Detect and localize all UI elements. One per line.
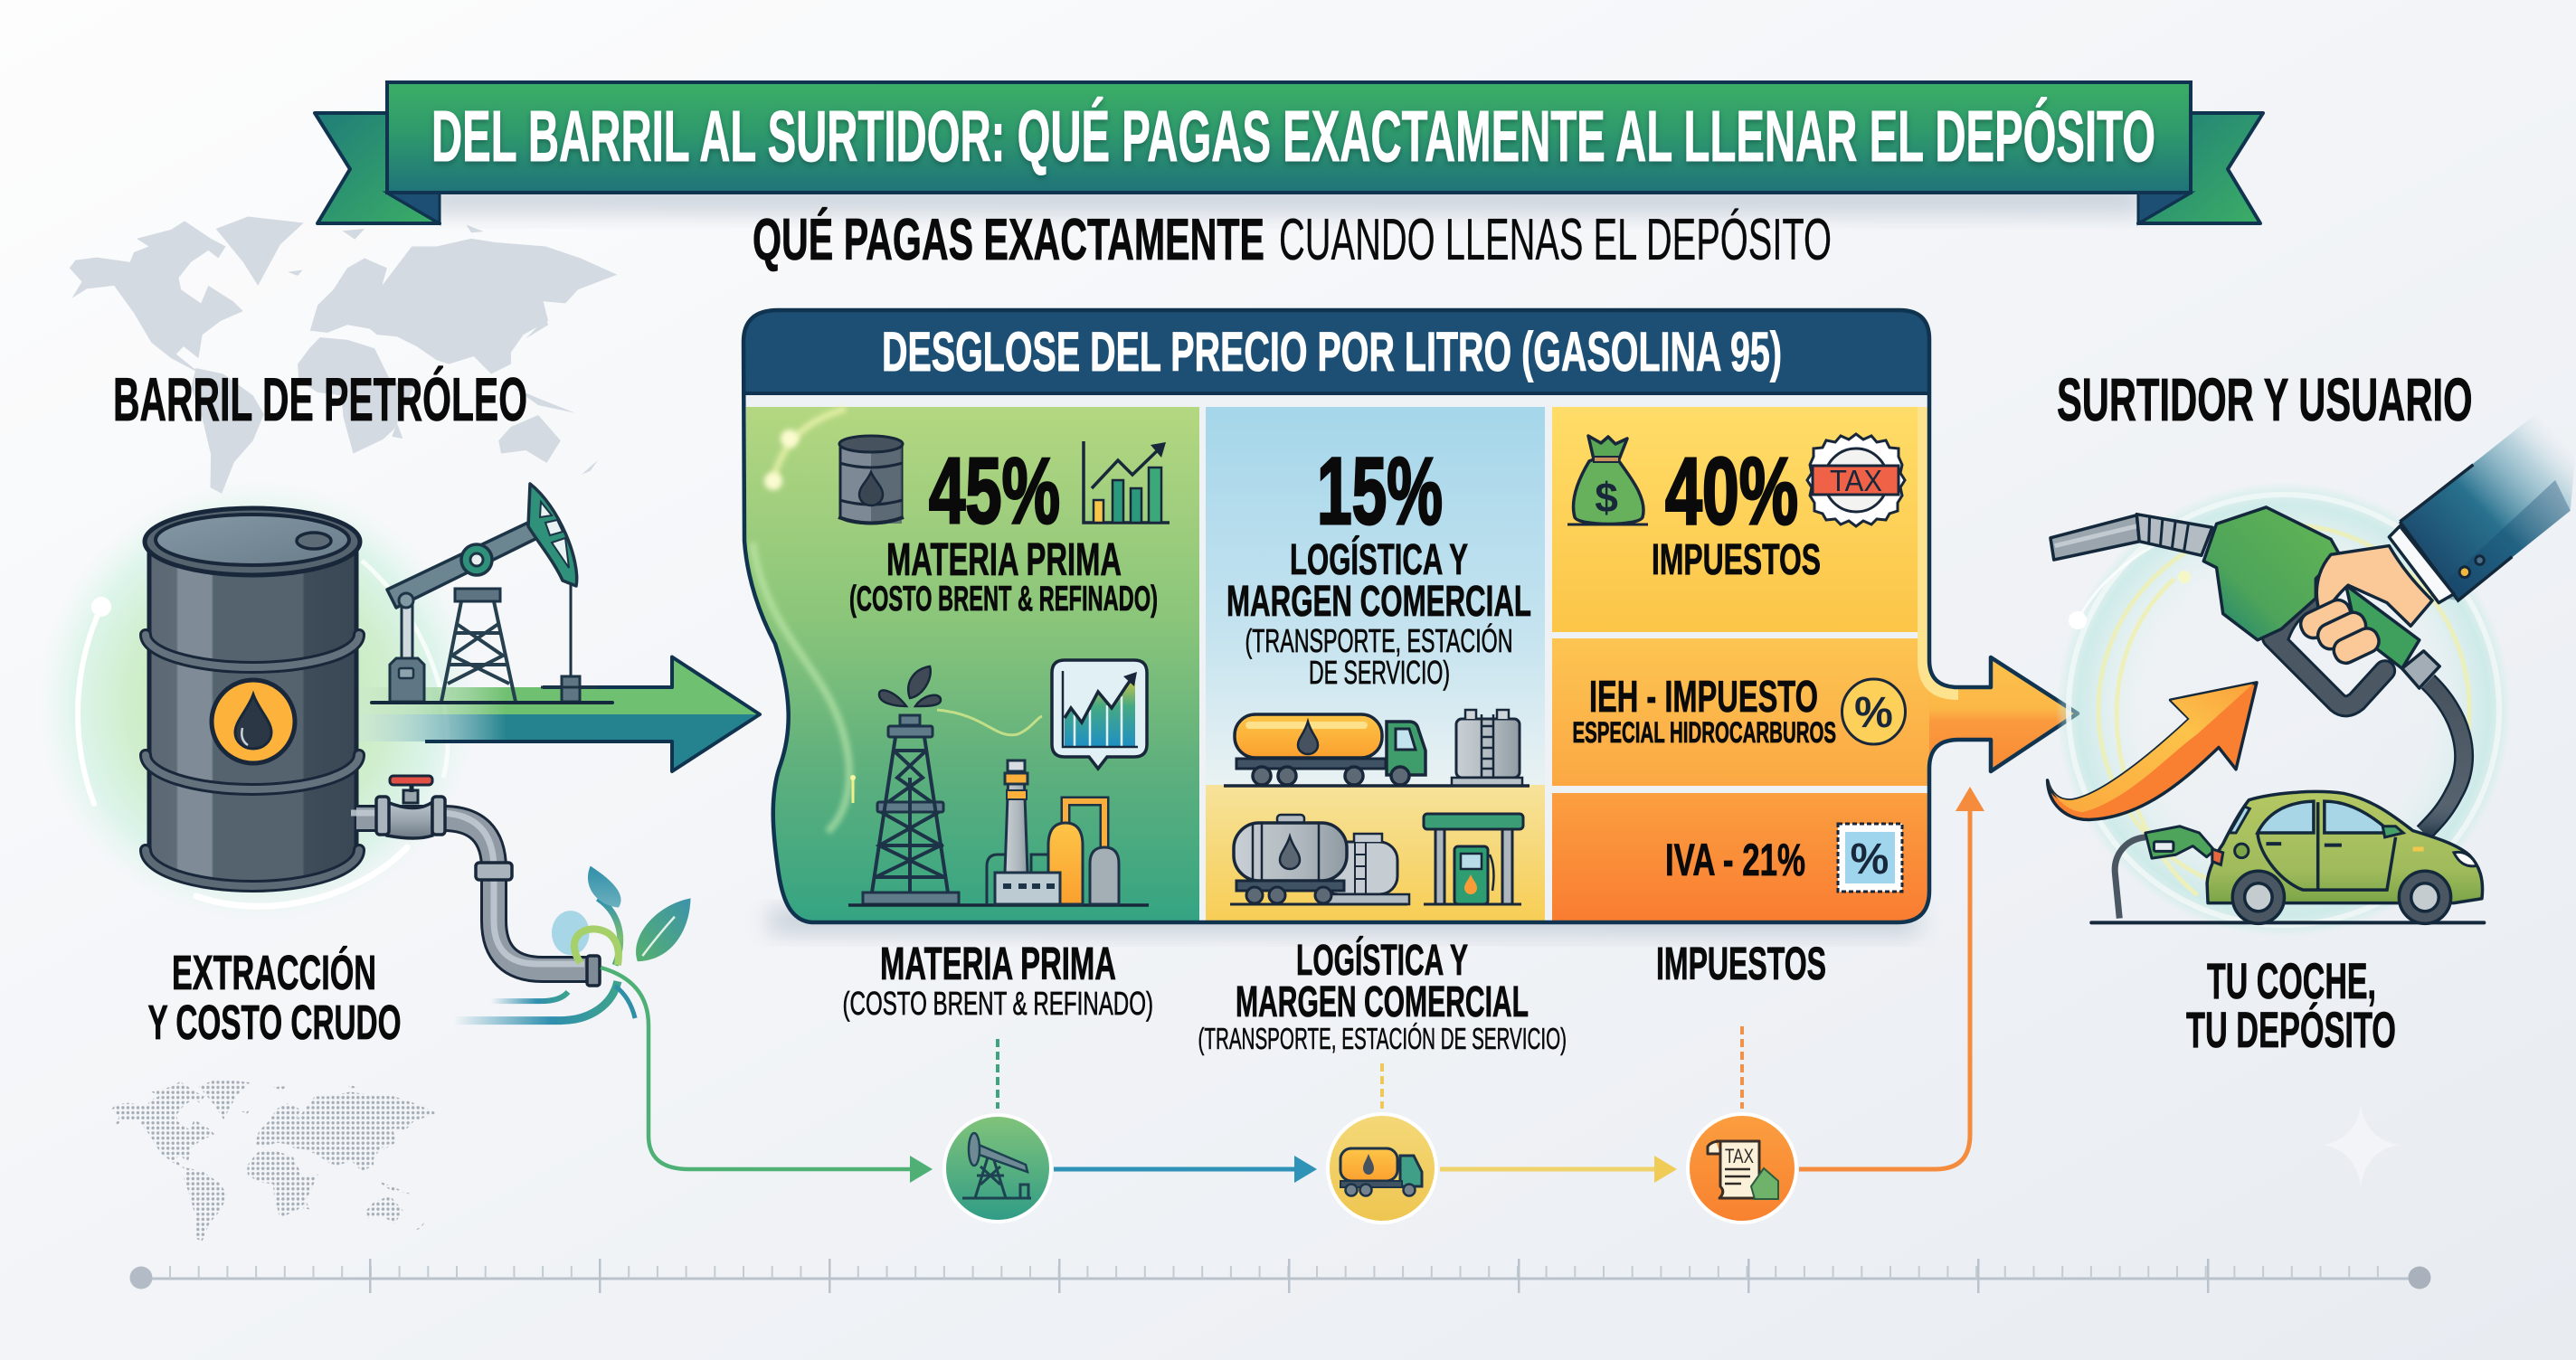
world map: dotted <box>112 1079 437 1242</box>
trigger guard <box>2273 600 2385 706</box>
40 percent: 40% <box>1665 439 1798 544</box>
motor box <box>390 658 424 702</box>
polished rod <box>570 582 572 676</box>
label: margen comercial: MARGEN COMERCIAL <box>1226 578 1531 626</box>
headlight <box>2454 852 2477 866</box>
step icon: pump jack <box>944 1115 1051 1222</box>
panel header <box>743 310 1929 392</box>
ground line <box>372 701 612 704</box>
label: costo brent: (COSTO BRENT & REFINADO) <box>843 985 1153 1022</box>
wheels <box>2232 871 2451 923</box>
panel base <box>743 310 2078 922</box>
oil drop label <box>212 680 295 763</box>
sleeve <box>2400 412 2576 600</box>
icon: percent circle <box>1842 679 1905 744</box>
ribbon left tail <box>315 113 440 223</box>
left caption: extraccion y costo crudo: Y COSTO CRUDO <box>148 996 402 1050</box>
ring upper <box>146 635 359 667</box>
right caption: tu coche tu deposito <box>2186 952 2396 1058</box>
orange arrow out of panel <box>1929 657 2078 771</box>
pivot <box>461 544 492 575</box>
pipe flanges <box>476 863 512 880</box>
labels under the panel <box>843 936 1826 1055</box>
car windows <box>2258 801 2391 833</box>
fuel nozzle and hand <box>2050 412 2576 833</box>
icon: tax seal: TAX <box>1830 464 1882 497</box>
icon: percent stamp: % <box>1851 836 1889 883</box>
world map: faded silhouette <box>70 217 617 494</box>
horsehead <box>528 484 577 586</box>
icon: money bag: $ <box>1595 474 1618 521</box>
orange swoosh arrow <box>2048 683 2257 820</box>
flow connector lines <box>601 787 1984 1183</box>
column: impuestos <box>1552 407 2078 921</box>
box: iva <box>1552 793 1928 921</box>
subtitle: CUANDO LLENAS EL DEPÓSITO <box>1279 206 1832 272</box>
car body <box>2207 791 2483 903</box>
collar <box>2402 651 2439 688</box>
icon: percent stamp <box>1838 824 1902 892</box>
icon: bar chart <box>1084 441 1170 523</box>
timeline ruler <box>130 1266 2431 1289</box>
step icon: tax scroll <box>1688 1114 1796 1223</box>
label: especial hidrocarburos: ESPECIAL HIDROCARBUROS <box>1572 716 1836 749</box>
icon: gas station <box>1424 814 1523 904</box>
right caption: tu coche tu deposito: TU DEPÓSITO <box>2186 1001 2396 1058</box>
ribbon main band <box>387 82 2191 193</box>
label: margen: MARGEN COMERCIAL <box>1236 978 1529 1026</box>
fingers <box>2297 596 2382 666</box>
blue line <box>1054 1166 1297 1172</box>
label: iva: IVA - 21% <box>1665 835 1805 885</box>
ground line <box>848 903 1149 907</box>
counterweight rod <box>402 604 412 660</box>
label: transporte: (TRANSPORTE, ESTACIÓN DE SERVICIO) <box>1198 1022 1567 1055</box>
small hose <box>2115 837 2145 919</box>
orange line <box>1799 807 1970 1169</box>
bottom rim <box>146 850 359 886</box>
door lines <box>2258 802 2396 890</box>
corrugated neck <box>2136 515 2212 555</box>
icon: small barrel <box>838 436 904 524</box>
oil pump jack <box>372 484 612 703</box>
big arrow from barrel to panel <box>356 656 760 771</box>
dotted drop lines <box>996 1039 999 1109</box>
hand <box>2316 546 2432 626</box>
pump and car glow rings <box>2056 482 2512 938</box>
step icon: tax scroll: TAX <box>1725 1145 1754 1167</box>
label: ieh impuesto: IEH - IMPUESTO <box>1589 673 1818 722</box>
small nozzle <box>2145 826 2214 858</box>
ground line <box>1224 784 1530 788</box>
oil barrel <box>145 508 360 887</box>
ribbon fold left <box>387 193 440 223</box>
spark trail <box>937 710 1042 735</box>
icon: percent circle: % <box>1854 689 1893 737</box>
spout <box>2050 515 2139 560</box>
barrel lid <box>145 508 360 575</box>
icon: refinery <box>987 760 1119 904</box>
bung <box>297 533 331 549</box>
left caption: extraccion y costo crudo: EXTRACCIÓN <box>172 946 376 1000</box>
left heading: barril de petroleo: BARRIL DE PETRÓLEO <box>113 365 527 434</box>
panel shadow <box>769 909 1918 932</box>
label: impuestos: IMPUESTOS <box>1652 536 1821 584</box>
column: logistica <box>1206 407 1545 921</box>
title banner ribbon <box>315 82 2263 223</box>
label: logistica y: LOGÍSTICA Y <box>1290 535 1468 584</box>
panel header text: DESGLOSE DEL PRECIO POR LITRO (GASOLINA 95) <box>882 321 1782 382</box>
icon: money bag <box>1567 436 1648 524</box>
label: logistica: LOGÍSTICA Y <box>1296 936 1468 985</box>
valve handle <box>390 776 432 785</box>
label: impuestos: IMPUESTOS <box>1656 938 1826 989</box>
glow behind barrel <box>36 479 479 922</box>
icon: storage silo <box>1452 710 1522 786</box>
panel outline <box>743 310 2078 922</box>
fuel cap <box>2235 844 2249 858</box>
drain pipe with valve <box>351 776 600 986</box>
valve body <box>387 802 432 838</box>
icon: tax seal <box>1807 434 1905 526</box>
green line <box>601 968 912 1169</box>
yellow line <box>1440 1166 1657 1172</box>
sparkle decoration <box>2323 1105 2399 1186</box>
callout: rising price chart <box>1052 660 1147 769</box>
icon: oil derrick <box>863 666 959 904</box>
box: ieh with arrow base <box>1552 638 2078 786</box>
barrel body <box>149 542 356 887</box>
price breakdown panel <box>743 310 2078 932</box>
15 percent: 15% <box>1317 439 1443 544</box>
subtitle: QUÉ PAGAS EXACTAMENTE <box>753 206 1264 272</box>
handle <box>2346 585 2420 668</box>
column: materia prima <box>746 407 1199 921</box>
label: costo brent y refinado: (COSTO BRENT & REFINADO) <box>849 580 1158 619</box>
cuff <box>2389 526 2454 603</box>
ribbon fold right <box>2138 193 2191 223</box>
nozzle body <box>2203 507 2340 640</box>
ribbon right tail <box>2138 113 2263 223</box>
mirror <box>2382 826 2403 837</box>
right caption: tu coche tu deposito: TU COCHE, <box>2207 952 2376 1009</box>
label: materia prima: MATERIA PRIMA <box>880 938 1116 989</box>
left caption: extraccion y costo crudo <box>148 946 402 1050</box>
label: materia prima: MATERIA PRIMA <box>886 534 1122 585</box>
ring lower <box>146 755 359 789</box>
hose <box>2424 682 2464 833</box>
pump tower <box>441 601 516 702</box>
label: de servicio: DE SERVICIO) <box>1309 654 1450 691</box>
icon: tanker truck <box>1235 714 1425 785</box>
45 percent: 45% <box>929 439 1060 543</box>
car with fuel nozzle <box>2091 791 2484 923</box>
step icon: tanker <box>1328 1114 1436 1223</box>
sprout and swoosh at pipe exit <box>454 866 691 1021</box>
walking beam <box>387 520 543 608</box>
ground line <box>2091 921 2484 924</box>
icon: storage tanks <box>1230 815 1409 904</box>
label: transporte: (TRANSPORTE, ESTACIÓN <box>1245 622 1512 659</box>
